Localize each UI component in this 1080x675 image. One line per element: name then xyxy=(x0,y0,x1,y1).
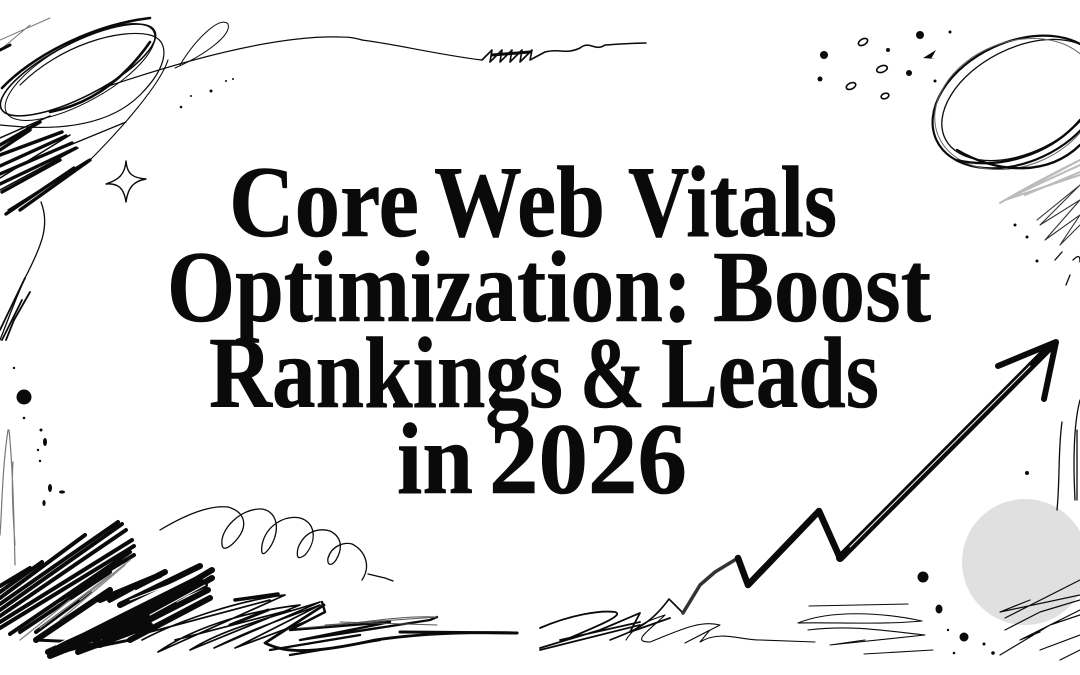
scribble: top-left ellipses and hatching xyxy=(0,5,362,214)
scribble: bottom-left long zigzag stroke xyxy=(265,602,517,655)
title: & xyxy=(580,317,645,430)
title: 2026 xyxy=(489,403,687,516)
watercolor circle xyxy=(962,499,1080,625)
scribble: bottom-left dense hatching xyxy=(0,522,212,656)
scribble: left edge strokes xyxy=(0,202,45,565)
ink ring droplets xyxy=(845,37,890,100)
title: Core xyxy=(229,146,419,259)
ink droplets top-right xyxy=(818,30,1038,262)
scribble: top-right ring and hatching xyxy=(911,10,1080,285)
ink dots top-left xyxy=(180,78,234,108)
title: Optimization: xyxy=(167,231,692,344)
title: Web xyxy=(434,146,605,259)
scribble: bottom-centre strokes xyxy=(540,604,933,654)
sparkle star icon xyxy=(106,161,146,202)
title: Rankings xyxy=(209,317,563,430)
scribble: bottom-right strokes xyxy=(1000,400,1080,660)
rising arrow chart line xyxy=(610,342,1056,640)
title: Boost xyxy=(713,231,931,344)
title xyxy=(167,146,931,516)
title: Leads xyxy=(661,317,879,430)
title: in xyxy=(397,403,473,516)
title: Vitals xyxy=(628,146,837,259)
ink blot left xyxy=(13,367,65,506)
ink dots bottom-right xyxy=(918,471,1029,655)
scribble: top wavy line xyxy=(362,40,646,62)
spiral squiggle xyxy=(160,507,393,581)
scribble: bottom-left light strokes xyxy=(142,594,320,652)
